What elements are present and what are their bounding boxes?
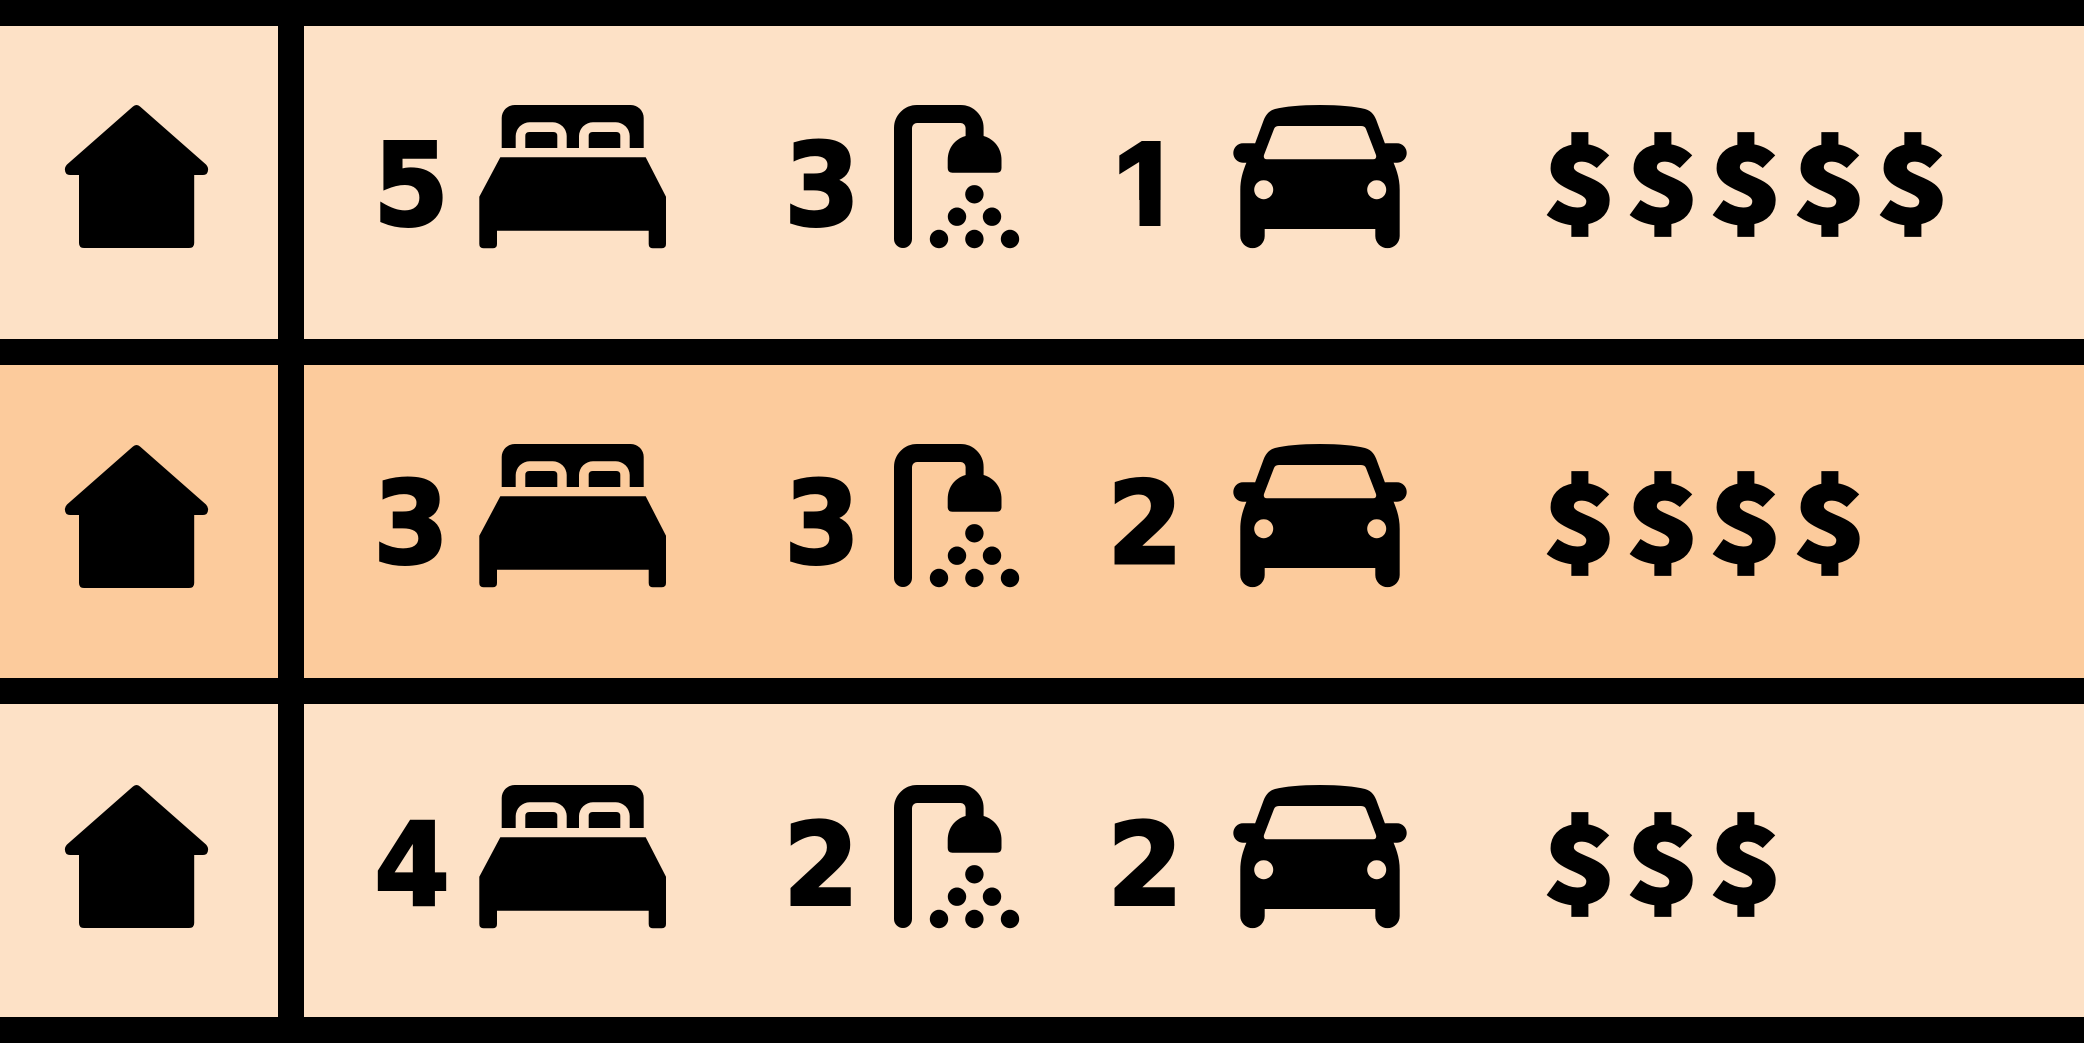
price rating, row 2: $ bbox=[1794, 441, 1866, 592]
parking count, row 3: 2 bbox=[1107, 800, 1183, 932]
price rating, row 2 bbox=[1544, 441, 1866, 592]
price rating, row 1: $ bbox=[1627, 102, 1699, 253]
row 1 bbox=[65, 102, 1949, 253]
price rating, row 2: $ bbox=[1544, 441, 1616, 592]
price rating, row 1 bbox=[1544, 102, 1949, 253]
price rating, row 2: $ bbox=[1627, 441, 1699, 592]
icon: shower, row 3 bbox=[903, 794, 1019, 928]
icon: bed, row 2 bbox=[479, 444, 666, 587]
row 3 bbox=[65, 782, 1782, 933]
bedroom count, row 2: 3 bbox=[373, 458, 449, 591]
bedroom count, row 1: 5 bbox=[373, 120, 449, 253]
icon: car, row 2 bbox=[1233, 444, 1407, 587]
price rating, row 3: $ bbox=[1627, 782, 1699, 933]
icon: car, row 3 bbox=[1233, 785, 1407, 928]
price rating, row 1: $ bbox=[1544, 102, 1616, 253]
icon: house, row 3 bbox=[65, 785, 208, 928]
icon: house, row 1 bbox=[65, 105, 208, 248]
icon: shower, row 1 bbox=[903, 114, 1019, 248]
row 3 background: house C bbox=[0, 704, 2084, 1017]
price rating, row 1: $ bbox=[1710, 102, 1782, 253]
icon: bed, row 1 bbox=[479, 105, 666, 248]
icon: bed, row 3 bbox=[479, 785, 666, 928]
price rating, row 3: $ bbox=[1710, 782, 1782, 933]
parking count, row 1: 1 bbox=[1114, 118, 1180, 252]
price rating, row 1: $ bbox=[1794, 102, 1866, 253]
row 2 bbox=[65, 441, 1866, 592]
price rating, row 1: $ bbox=[1877, 102, 1949, 253]
bedroom count, row 3: 4 bbox=[374, 800, 450, 932]
icon: car, row 1 bbox=[1233, 105, 1407, 248]
price rating, row 2: $ bbox=[1710, 441, 1782, 592]
bathroom count, row 1: 3 bbox=[784, 120, 860, 253]
row 2 background: house B bbox=[0, 365, 2084, 678]
bathroom count, row 3: 2 bbox=[783, 800, 859, 932]
price rating, row 3: $ bbox=[1544, 782, 1616, 933]
bathroom count, row 2: 3 bbox=[784, 458, 860, 591]
row 1 background: house A bbox=[0, 26, 2084, 339]
parking count, row 2: 2 bbox=[1107, 458, 1183, 591]
price rating, row 3 bbox=[1544, 782, 1782, 933]
icon: house, row 2 bbox=[65, 445, 208, 588]
icon: shower, row 2 bbox=[903, 453, 1019, 587]
